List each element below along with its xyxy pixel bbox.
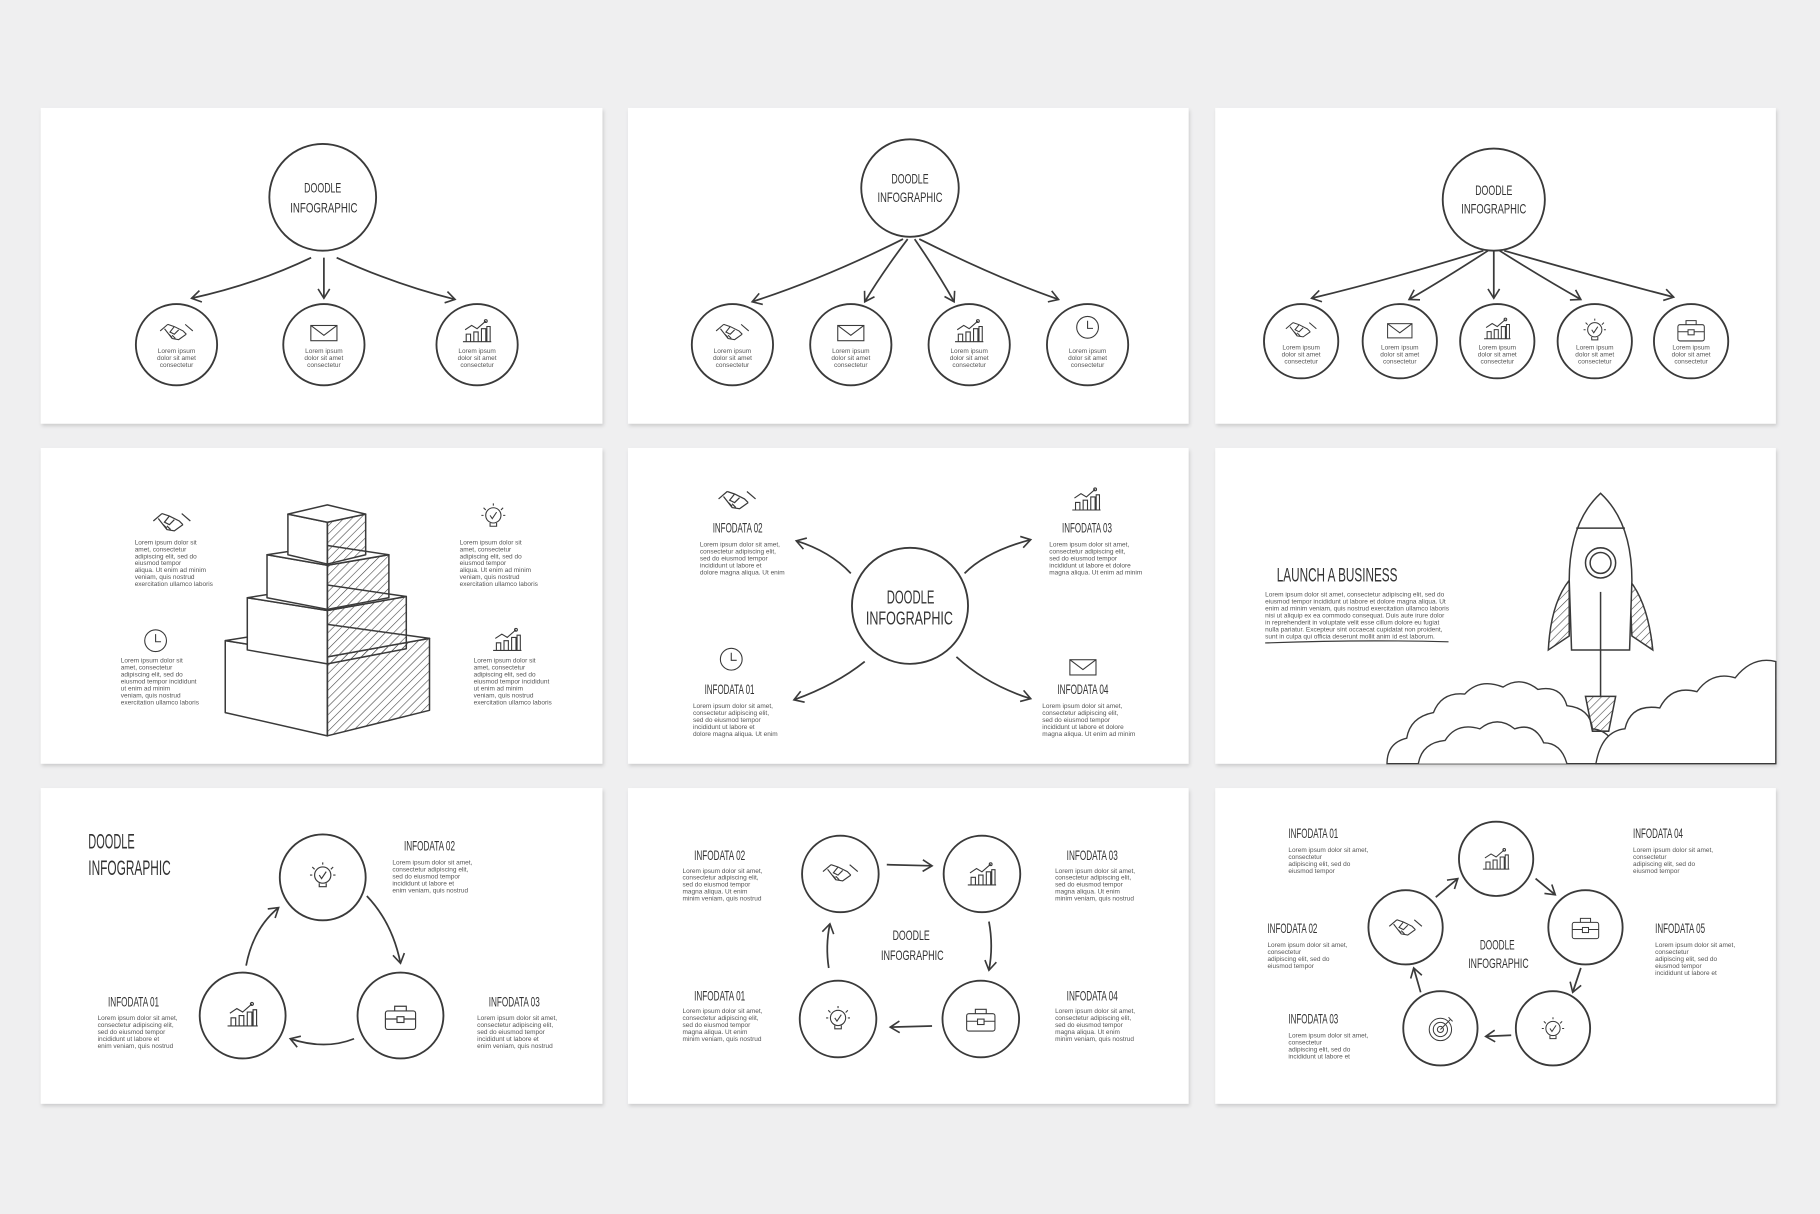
text block: enim ad minim veniam, quis nostrud exercitation ullamco laboris [1265,605,1450,612]
main circle: DOODLE [1475,182,1512,198]
center title [1468,936,1529,971]
item 01: incididunt ut labore et [98,1036,159,1043]
items: sed do eiusmod tempor [683,882,751,889]
items: minim veniam, quis nostrud [1055,896,1134,903]
nodes [1264,304,1728,378]
nodes: consectetur [834,362,868,369]
main circle [1443,149,1545,251]
items: adipiscing elit, sed do [1288,861,1351,868]
text block: chart: amet, consectetur [474,665,526,672]
item 02: enim veniam, quis nostrud [392,888,468,895]
item: infodata 04 [1042,660,1135,738]
items: minim veniam, quis nostrud [1055,1036,1134,1043]
arrows [794,540,1031,700]
main circle: INFOGRAPHIC [1461,201,1526,217]
nodes: consectetur [1383,358,1417,365]
items: sed do eiusmod tempor [683,1022,751,1029]
text block: chart: ut enim ad minim [474,686,523,693]
items: INFODATA 04 [1067,987,1118,1003]
items: eiusmod tempor [1288,868,1336,875]
items: magna aliqua. Ut enim [683,1029,747,1036]
panel: 3-branch tree [41,108,602,424]
text block: nulla pariatur. Excepteur sint occaecat cupidatat non proident, [1265,626,1443,633]
panel: 4-cycle [628,788,1189,1104]
nodes: dolor sit amet [1068,355,1107,362]
text block: bulb: Lorem ipsum dolor sit [460,539,522,546]
text block: eiusmod tempor incididunt ut labore et dolore magna aliqua. Ut [1265,599,1446,606]
main circle [852,548,968,664]
items: INFODATA 02 [1267,920,1318,936]
text block: in reprehenderit in voluptate velit esse cillum dolore eu fugiat [1265,619,1439,626]
panel: 5-branch tree [1215,108,1776,424]
item 03 [477,993,557,1050]
text block: nisi ut aliquip ex ea commodo consequat. Duis aute irure dolor [1265,612,1445,619]
text block: handshake: veniam, quis nostrud [135,574,195,581]
circles [200,834,443,1058]
panel: 3-cycle [41,788,602,1104]
items: adipiscing elit, sed do [1655,956,1718,963]
nodes: Lorem ipsum [950,348,988,355]
nodes [136,304,518,385]
nodes: dolor sit amet [304,355,344,362]
text block: bulb: amet, consectetur [460,546,512,553]
text block: clock: adipiscing elit, sed do [121,672,183,679]
text block [1265,592,1450,640]
nodes: dolor sit amet [713,355,752,362]
item: infodata 03: INFODATA 03 [1062,520,1112,536]
title [88,830,171,880]
item: infodata 04: INFODATA 04 [1057,681,1109,697]
main circle [269,144,376,251]
text block: bulb [460,503,539,588]
text block: handshake: adipiscing elit, sed do [135,553,197,560]
item 01: INFODATA 01 [108,993,159,1009]
arrows [246,896,400,1045]
text block: clock: amet, consectetur [121,665,173,672]
item: infodata 01: consectetur adipiscing elit, [693,710,769,717]
arrows [1312,251,1674,299]
nodes: consectetur [307,362,341,369]
items: consectetur [1288,1040,1323,1047]
nodes: Lorem ipsum [1479,344,1516,351]
nodes: dolor sit amet [1380,351,1419,358]
items: INFODATA 03 [1067,847,1118,863]
items: consectetur [1267,949,1302,956]
items: Lorem ipsum dolor sit amet, [1055,1008,1135,1015]
items: INFODATA 04 [1633,825,1683,841]
text block: Lorem ipsum dolor sit amet, consectetur adipiscing elit, sed do [1265,592,1445,599]
center title [881,927,944,963]
panel: 5-cycle [1215,788,1776,1104]
nodes: Lorem ipsum [158,348,195,355]
circles [800,836,1020,1057]
items: Lorem ipsum dolor sit amet, [1288,1033,1369,1040]
item 01: enim veniam, quis nostrud [98,1043,174,1050]
panel: launch a business [1215,448,1776,764]
item: infodata 02 [700,492,785,577]
nodes: consectetur [160,362,194,369]
text block: bulb: eiusmod tempor [460,560,507,567]
nodes: Lorem ipsum [305,348,343,355]
items: consectetur [1288,854,1323,861]
items: Lorem ipsum dolor sit amet, [683,868,763,875]
text block: handshake: eiusmod tempor [135,560,182,567]
item 02: Lorem ipsum dolor sit amet, [392,860,473,867]
items: consectetur adipiscing elit, [683,875,759,882]
item: infodata 04: sed do eiusmod tempor [1042,717,1111,724]
nodes: Lorem ipsum [1576,344,1614,351]
items: consectetur [1655,949,1689,956]
items: Lorem ipsum dolor sit amet, [1055,868,1135,875]
item: infodata 01: INFODATA 01 [705,681,755,697]
items: incididunt ut labore et [1288,1053,1350,1060]
nodes: Lorem ipsum [1381,344,1419,351]
nodes [692,304,1128,385]
text block: handshake: exercitation ullamco laboris [135,581,214,588]
panel: 4-branch tree [628,108,1189,424]
text block: bulb: aliqua. Ut enim ad minim [460,567,531,574]
item: infodata 03: consectetur adipiscing elit, [1049,549,1126,556]
nodes: consectetur [1578,358,1612,365]
nodes: dolor sit amet [950,355,989,362]
text block: handshake [135,514,214,588]
main circle: DOODLE [887,587,934,608]
nodes: Lorem ipsum [1069,348,1106,355]
item: infodata 03: incididunt ut labore et dolore [1049,563,1131,570]
title: DOODLE [88,830,135,853]
items: Lorem ipsum dolor sit amet, [683,1008,763,1015]
text block: handshake: amet, consectetur [135,546,187,553]
clouds [1387,660,1776,764]
text block: chart: eiusmod tempor incididunt [474,679,549,686]
text block: clock: Lorem ipsum dolor sit [121,658,183,665]
nodes: consectetur [1481,358,1515,365]
items: eiusmod tempor [1267,963,1315,970]
stacked boxes chart [225,505,430,736]
items: INFODATA 01 [1288,825,1338,841]
title: LAUNCH A BUSINESS [1277,564,1397,586]
text block: clock: exercitation ullamco laboris [121,699,200,706]
item 02: INFODATA 02 [404,838,455,854]
item 03: consectetur adipiscing elit, [477,1022,553,1029]
arrows [1414,879,1581,1036]
item: infodata 02: incididunt ut labore et [700,563,762,570]
text block: handshake: aliqua. Ut enim ad minim [135,567,206,574]
items: INFODATA 02 [694,847,745,863]
items: adipiscing elit, sed do [1633,861,1695,868]
item: infodata 01: incididunt ut labore et [693,724,755,731]
nodes: Lorem ipsum [832,348,870,355]
nodes: dolor sit amet [1672,351,1711,358]
item 03: INFODATA 03 [489,993,540,1009]
items: magna aliqua. Ut enim [1055,1029,1120,1036]
item: infodata 02: consectetur adipiscing elit, [700,549,776,556]
item: infodata 02: sed do eiusmod tempor [700,556,769,563]
items [683,847,1135,1043]
center title: DOODLE [1480,936,1515,952]
item: infodata 02: dolore magna aliqua. Ut enim [700,570,785,577]
item: infodata 03: magna aliqua. Ut enim ad minim [1049,570,1142,577]
items: incididunt ut labore et [1655,970,1717,977]
item 02: sed do eiusmod tempor [392,874,461,881]
main circle: INFOGRAPHIC [290,199,358,215]
text block: chart: exercitation ullamco laboris [474,699,553,706]
item: infodata 03: sed do eiusmod tempor [1049,556,1118,563]
center title: DOODLE [893,927,930,943]
items: eiusmod tempor [1633,868,1680,875]
text block: bulb: veniam, quis nostrud [460,574,520,581]
main circle: DOODLE [891,170,929,186]
nodes: dolor sit amet [1575,351,1614,358]
items: adipiscing elit, sed do [1267,956,1330,963]
item 01: consectetur adipiscing elit, [98,1022,174,1029]
text block: chart: veniam, quis nostrud [474,693,534,700]
nodes: dolor sit amet [1282,351,1321,358]
rocket [1548,493,1653,731]
items: Lorem ipsum dolor sit amet, [1655,942,1735,949]
nodes: Lorem ipsum [714,348,751,355]
nodes: dolor sit amet [831,355,870,362]
nodes: consectetur [716,362,750,369]
item: infodata 02: Lorem ipsum dolor sit amet, [700,542,780,549]
items: consectetur adipiscing elit, [683,1015,759,1022]
item 03: incididunt ut labore et [477,1036,539,1043]
nodes: consectetur [460,362,495,369]
items: Lorem ipsum dolor sit amet, [1288,847,1369,854]
item: infodata 01: dolore magna aliqua. Ut enim [693,731,778,738]
nodes: consectetur [1071,362,1105,369]
panel: radial 4 arrows [628,448,1189,764]
item 03: enim veniam, quis nostrud [477,1043,553,1050]
center title: INFOGRAPHIC [881,947,944,963]
item 02 [392,838,473,895]
text block: chart: adipiscing elit, sed do [474,672,536,679]
items: adipiscing elit, sed do [1288,1047,1351,1054]
items: INFODATA 03 [1288,1011,1338,1027]
items: Lorem ipsum dolor sit amet, [1267,942,1348,949]
item 01: Lorem ipsum dolor sit amet, [98,1015,178,1022]
text block: bulb: exercitation ullamco laboris [460,581,539,588]
nodes: consectetur [1284,358,1319,365]
items: magna aliqua. Ut enim [683,889,747,896]
nodes: dolor sit amet [458,355,497,362]
nodes: Lorem ipsum [458,348,496,355]
item 01: sed do eiusmod tempor [98,1029,166,1036]
text block: clock: eiusmod tempor incididunt [121,679,197,686]
items [1267,825,1735,1060]
text block: bulb: adipiscing elit, sed do [460,553,522,560]
items: magna aliqua. Ut enim [1055,889,1120,896]
panel: stacked boxes [41,448,602,764]
item: infodata 04: consectetur adipiscing elit, [1042,710,1119,717]
circles [1368,822,1623,1065]
text block: handshake: Lorem ipsum dolor sit [135,539,197,546]
items: sed do eiusmod tempor [1055,882,1124,889]
item 01 [98,993,178,1050]
items: Lorem ipsum dolor sit amet, [1633,847,1713,854]
items: sed do eiusmod tempor [1055,1022,1124,1029]
item: infodata 04: magna aliqua. Ut enim ad minim [1042,731,1135,738]
item 02: incididunt ut labore et [392,881,454,888]
items: consectetur adipiscing elit, [1055,1015,1131,1022]
text block: clock: ut enim ad minim [121,686,170,693]
items: INFODATA 01 [694,987,745,1003]
items: minim veniam, quis nostrud [683,896,762,903]
item: infodata 02: INFODATA 02 [713,520,763,536]
text block: clock [121,630,200,706]
main circle: INFOGRAPHIC [866,607,953,628]
arrows [752,239,1059,302]
nodes: consectetur [952,362,987,369]
text block: sunt in culpa qui officia deserunt mollit anim id est laborum. [1265,633,1435,640]
nodes: dolor sit amet [1478,351,1517,358]
item 03: Lorem ipsum dolor sit amet, [477,1015,557,1022]
nodes: Lorem ipsum [1282,344,1320,351]
items: minim veniam, quis nostrud [683,1036,762,1043]
item 02: consectetur adipiscing elit, [392,867,469,874]
item: infodata 01: sed do eiusmod tempor [693,717,762,724]
item 03: sed do eiusmod tempor [477,1029,546,1036]
main circle: INFOGRAPHIC [878,189,942,205]
items: consectetur [1633,854,1667,861]
main circle [861,139,959,237]
center title: INFOGRAPHIC [1468,955,1529,971]
item: infodata 03: Lorem ipsum dolor sit amet, [1049,542,1129,549]
items: consectetur adipiscing elit, [1055,875,1131,882]
item: infodata 03 [1049,488,1142,577]
item: infodata 01 [693,648,778,738]
nodes: consectetur [1674,358,1709,365]
text block: clock: veniam, quis nostrud [121,693,181,700]
arrows [827,865,991,1027]
items: eiusmod tempor [1655,963,1702,970]
main circle: DOODLE [304,180,341,196]
arrows [192,258,455,299]
nodes: Lorem ipsum [1672,344,1710,351]
item: infodata 01: Lorem ipsum dolor sit amet, [693,703,773,710]
items: INFODATA 05 [1655,920,1705,936]
item: infodata 04: Lorem ipsum dolor sit amet, [1042,703,1123,710]
text block: chart [474,628,553,706]
nodes: dolor sit amet [157,355,196,362]
title: INFOGRAPHIC [88,857,171,880]
text block: chart: Lorem ipsum dolor sit [474,658,536,665]
item: infodata 04: incididunt ut labore et dolore [1042,724,1124,731]
